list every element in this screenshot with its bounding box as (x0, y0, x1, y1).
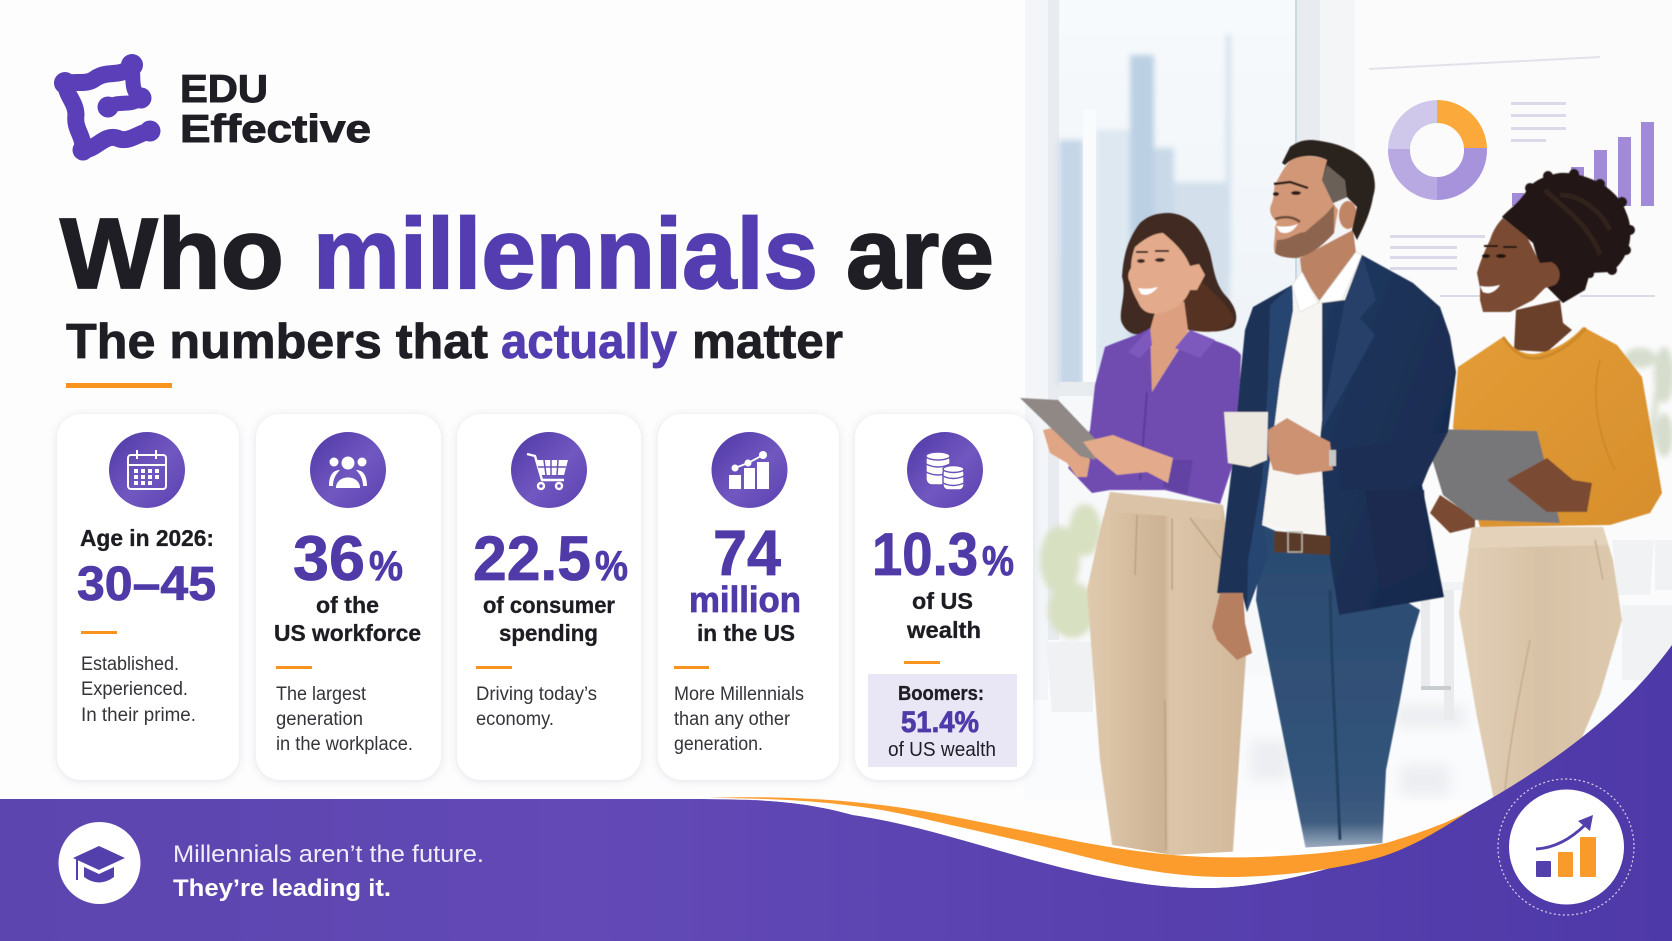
callout: boomers: Boomers: (898, 683, 984, 705)
card: workforce: of the (316, 592, 379, 618)
plant right (1624, 347, 1672, 460)
footer message: Millennials aren’t the future. (173, 841, 484, 868)
logo text: EDU (180, 68, 268, 111)
logo (54, 54, 371, 160)
card: spending: 22.5 (473, 524, 591, 594)
callout: boomers (868, 674, 1017, 767)
card: workforce: generation (276, 709, 363, 730)
title: Who (60, 198, 284, 310)
mug (1224, 412, 1268, 467)
floor reflections (1250, 705, 1465, 795)
card: age (57, 414, 239, 780)
plant pots and shelf right (1612, 540, 1672, 680)
table and legs (1412, 582, 1472, 720)
logo: Effective (180, 108, 371, 151)
man in navy blazer (1212, 140, 1456, 855)
plant pot left (1046, 642, 1093, 712)
title: are (846, 198, 994, 310)
subtitle: actually (501, 315, 677, 369)
wall bar chart (1512, 122, 1654, 206)
woman in orange sweater (1423, 169, 1662, 810)
card: spending: economy. (476, 709, 554, 730)
subtitle (66, 315, 843, 369)
subtitle: matter (692, 315, 843, 369)
subtitle: The numbers that (66, 315, 488, 369)
card: population: than any other (674, 709, 791, 730)
subtitle underline (66, 383, 172, 388)
icon: people (310, 432, 386, 508)
title: millennials (313, 198, 818, 310)
card: population: 74 (713, 517, 781, 589)
icon: graduation cap (58, 822, 140, 904)
footer message (173, 841, 484, 902)
card: wealth: % (982, 537, 1014, 584)
logo mark (54, 54, 160, 160)
belt (1274, 531, 1330, 555)
card: workforce (256, 414, 441, 780)
footer message: They’re leading it. (173, 875, 391, 902)
card: wealth: 10.3 (872, 521, 978, 588)
card: workforce: 36 (293, 524, 365, 594)
man ear (1339, 201, 1357, 229)
man face details (1273, 182, 1308, 233)
card: spending (457, 414, 641, 780)
orange wave stripe (709, 797, 1471, 877)
icon: coins (907, 432, 983, 508)
callout: boomers: of US wealth (888, 739, 996, 761)
hair bun (1502, 169, 1635, 303)
card: spending: spending (499, 620, 598, 646)
white wave stripe (704, 799, 1471, 888)
woman face details (1480, 245, 1517, 293)
card: wealth: of US (912, 588, 973, 614)
card: population: More Millennials (674, 684, 804, 705)
donut chart (1388, 100, 1487, 200)
icon: rising chart badge (1498, 779, 1634, 915)
board text lines (1390, 102, 1655, 297)
plant left (1040, 504, 1101, 638)
card: age: Age in 2026: (80, 525, 214, 551)
office photo background (1025, 0, 1672, 800)
card: age: In their prime. (81, 705, 196, 726)
woman face details (1136, 250, 1169, 295)
card: population: in the US (697, 620, 795, 646)
card: wealth: wealth (906, 617, 981, 643)
card: workforce: US workforce (274, 620, 421, 646)
woman in purple blouse (1020, 213, 1247, 865)
card: population: generation. (674, 734, 763, 755)
card: age: Established. (81, 654, 179, 675)
wall board charts (1369, 57, 1655, 297)
jacket right panel (1320, 255, 1456, 615)
card: workforce: % (369, 542, 403, 589)
three people (1020, 140, 1662, 865)
card: population (658, 414, 839, 780)
card: spending: Driving today’s (476, 684, 597, 705)
card: age: 30–45 (77, 558, 216, 611)
callout: boomers: 51.4% (901, 706, 979, 739)
icon: growth chart (712, 432, 788, 508)
card: age: Experienced. (81, 679, 188, 700)
title (60, 198, 994, 310)
man head (1270, 156, 1338, 258)
card: workforce: in the workplace. (276, 734, 413, 755)
card: spending: % (595, 542, 628, 589)
icon: calendar (109, 432, 185, 508)
jacket left panel (1217, 285, 1293, 612)
card: workforce: The largest (276, 684, 367, 705)
bottom purple banner with wave (0, 645, 1672, 941)
icon: cart (511, 432, 587, 508)
card: spending: of consumer (483, 592, 615, 618)
card: wealth (855, 414, 1033, 780)
card: population: million (689, 579, 801, 620)
